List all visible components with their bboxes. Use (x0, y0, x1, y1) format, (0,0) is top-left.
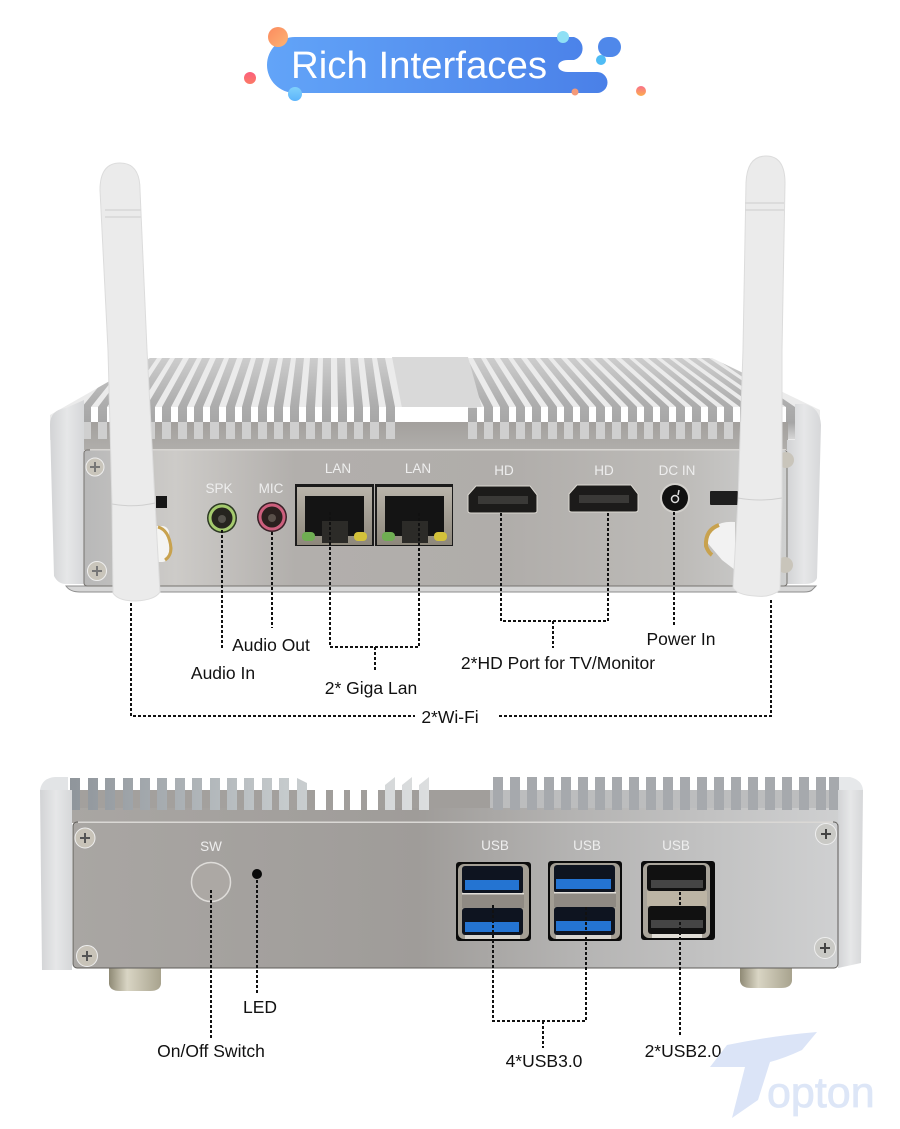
DC IN label: DC IN (659, 463, 695, 478)
HDMI port 2 (569, 485, 638, 512)
leader: Wi-Fi left (131, 603, 415, 716)
USB 2.0 stack (641, 861, 715, 940)
front panel (73, 822, 838, 968)
center flat band (392, 357, 482, 408)
panel top highlight (90, 449, 786, 450)
leader: Audio In (221, 530, 223, 650)
USB label: USB (662, 838, 690, 853)
LED label: LED (243, 997, 277, 1017)
panel: front device (40, 777, 863, 991)
fin fronts (82, 422, 781, 439)
chassis upper face center (305, 790, 490, 822)
On/Off Switch label: On/Off Switch (157, 1041, 265, 1061)
banner blob (598, 37, 621, 57)
rear panel (84, 450, 787, 586)
leader: Audio Out (271, 532, 273, 628)
LAN label: LAN (405, 461, 431, 476)
USB label: USB (573, 838, 601, 853)
HD label: HD (594, 463, 614, 478)
fins left group (84, 358, 395, 422)
Power In label: Power In (646, 629, 716, 649)
chassis body band (82, 422, 788, 450)
USB2.0 label: 2*USB2.0 (645, 1041, 722, 1061)
white gap notches (315, 790, 378, 810)
right antenna connector (705, 522, 735, 570)
leader: On/Off switch (210, 890, 212, 1040)
foot left (109, 968, 161, 991)
audio jack SPK (207, 503, 237, 533)
front fins left (70, 777, 429, 810)
HDMI port 1 (468, 486, 537, 513)
LAN label: LAN (325, 461, 351, 476)
leader: LED (256, 880, 258, 995)
LED (252, 869, 262, 879)
title text: Rich Interfaces (291, 44, 547, 87)
leader: Wi-Fi right (497, 600, 771, 716)
heatsink top (50, 358, 820, 440)
screw (814, 938, 836, 958)
Audio Out label: Audio Out (232, 635, 310, 655)
left black slot (156, 496, 167, 508)
left side block (50, 400, 84, 584)
HD label: HD (494, 463, 514, 478)
USB3.0 label: 4*USB3.0 (506, 1051, 583, 1071)
right side block (838, 790, 863, 968)
panel top highlight (78, 822, 833, 823)
chassis top corner right (838, 777, 863, 790)
left antenna connector (151, 526, 171, 562)
USB 3.0 stack 1 (456, 862, 531, 941)
screw (88, 562, 106, 580)
left side block (40, 790, 72, 970)
audio jack MIC (257, 502, 287, 532)
Giga Lan label: 2* Giga Lan (325, 678, 417, 698)
right antenna (733, 156, 785, 596)
bottom lip (66, 586, 816, 592)
power button (192, 862, 230, 902)
chassis lower band (70, 808, 840, 823)
fins right group (446, 358, 795, 439)
SPK label: SPK (205, 481, 233, 496)
DC power jack (660, 483, 690, 513)
screw (777, 557, 793, 573)
panel: rear device (50, 156, 821, 601)
white gaps between fins (91, 407, 786, 422)
USB label: USB (481, 838, 509, 853)
screw (778, 452, 794, 468)
leader: USB2.0 (679, 892, 681, 1035)
callouts front (157, 880, 722, 1071)
screw (86, 458, 104, 476)
chassis back face (70, 790, 305, 810)
HD Port label: 2*HD Port for TV/Monitor (461, 653, 655, 673)
title banner (244, 27, 646, 101)
LAN port 2 (375, 484, 453, 546)
right black slot (710, 491, 738, 505)
SW label: SW (200, 839, 222, 854)
LAN port 1 (295, 484, 374, 546)
front fins right (493, 777, 839, 810)
leader: Power In (673, 512, 675, 625)
logo wordmark: opton (767, 1069, 875, 1117)
leader: Giga Lan (330, 512, 419, 672)
leader: USB3.0 (493, 905, 586, 1048)
USB 3.0 stack 2 (548, 861, 622, 941)
right side block (787, 404, 821, 584)
chassis upper face right (490, 790, 840, 822)
left antenna (100, 163, 160, 601)
leader: HD Port (501, 512, 608, 648)
banner shape (267, 37, 608, 93)
screw (816, 824, 836, 844)
cooling fins (82, 358, 795, 439)
logo T mark (710, 1032, 817, 1118)
foot right (740, 966, 792, 988)
chassis top corner left (40, 777, 68, 790)
Topton logo (710, 1032, 875, 1118)
screw (75, 828, 95, 848)
screw (76, 946, 98, 966)
decorative bubbles (244, 27, 646, 101)
MIC label: MIC (259, 481, 284, 496)
Wi-Fi label: 2*Wi-Fi (421, 707, 479, 727)
callouts rear (131, 512, 771, 727)
Audio In label: Audio In (191, 663, 255, 683)
